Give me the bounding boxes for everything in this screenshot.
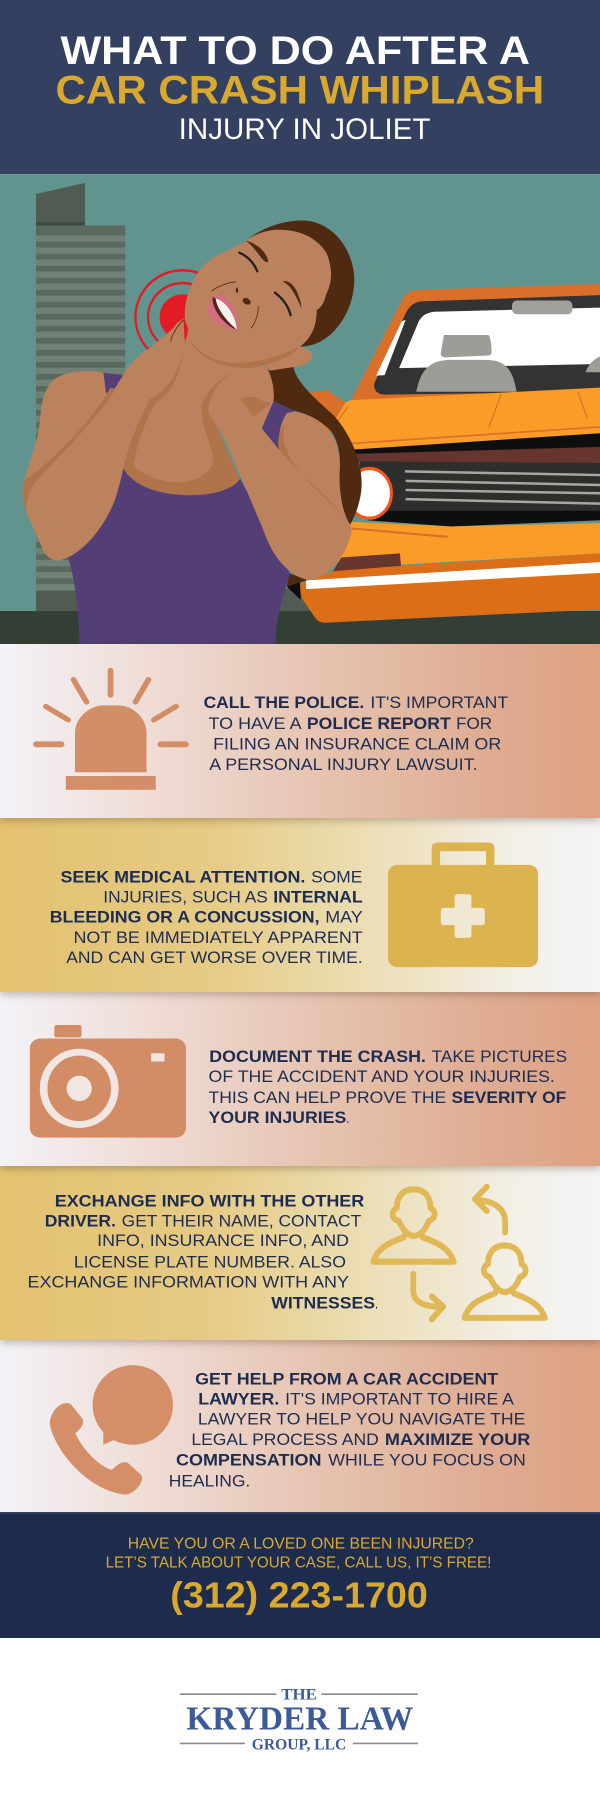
text: call the police: CALL THE POLICE. xyxy=(204,694,364,712)
text: exchange info: GET THEIR NAME, CONTACT xyxy=(122,1213,362,1230)
text: get help from a lawyer: LAWYER. xyxy=(198,1391,279,1409)
text: document the crash: OF THE ACCIDENT AND YOUR INJURIES. xyxy=(209,1068,555,1086)
text: exchange info: WITNESSES xyxy=(271,1295,375,1313)
text: get help from a lawyer: IT'S IMPORTANT TO HIRE A xyxy=(285,1391,514,1409)
eyebrows xyxy=(246,241,302,308)
arrow: down right xyxy=(413,1274,443,1320)
text: exchange info: DRIVER. xyxy=(45,1213,116,1230)
text: exchange info: . xyxy=(375,1295,378,1313)
text: call the police xyxy=(204,694,509,774)
text: get help from a lawyer xyxy=(169,1371,531,1490)
sky background xyxy=(0,174,600,644)
building xyxy=(36,183,125,611)
icon: two people exchanging xyxy=(373,1187,545,1320)
text: document the crash: SEVERITY OF xyxy=(452,1089,566,1107)
text: call the police: FILING AN INSURANCE CLAIM OR xyxy=(213,735,501,753)
closed eyes xyxy=(239,253,291,315)
text: call the police: TO HAVE A xyxy=(209,715,302,733)
text: exchange info: EXCHANGE INFO WITH THE OTHER xyxy=(55,1193,365,1211)
text: document the crash: THIS CAN HELP PROVE THE xyxy=(209,1089,446,1107)
logo: the kryder law group: KRYDER LAW xyxy=(186,1701,413,1738)
text: seek medical attention: INTERNAL xyxy=(273,888,363,906)
text: get help from a lawyer: LAWYER TO HELP YOU NAVIGATE THE xyxy=(198,1411,525,1429)
woman body xyxy=(23,318,362,644)
logo: the kryder law group: THE xyxy=(281,1687,317,1704)
text: document the crash: YOUR INJURIES xyxy=(209,1109,346,1127)
text: call the police: POLICE REPORT xyxy=(307,715,451,733)
panel: get help from a lawyer xyxy=(0,1339,600,1512)
text: seek medical attention: SOME xyxy=(311,868,362,886)
call to action text: LET’S TALK ABOUT YOUR CASE, CALL US, IT’S FREE! xyxy=(106,1554,491,1571)
title xyxy=(55,29,544,146)
ground xyxy=(0,611,600,644)
call to action text: HAVE YOU OR A LOVED ONE BEEN INJURED? xyxy=(128,1535,474,1553)
text: seek medical attention: AND CAN GET WORSE OVER TIME. xyxy=(66,949,363,967)
steps one to three content layer xyxy=(30,668,567,1138)
panel: seek medical attention xyxy=(0,818,600,992)
text: document the crash xyxy=(209,1048,567,1127)
text: call the police: IT'S IMPORTANT xyxy=(370,694,509,712)
illustration: woman with neck pain in front of crashed car xyxy=(0,174,600,644)
text: get help from a lawyer: WHILE YOU FOCUS ON xyxy=(328,1452,526,1470)
right arm and hand xyxy=(208,367,352,580)
text: exchange info: EXCHANGE INFORMATION WITH ANY xyxy=(28,1274,350,1291)
text: get help from a lawyer: LEGAL PROCESS AND xyxy=(191,1432,379,1449)
purple tank top xyxy=(68,467,290,644)
title: INJURY IN JOLIET xyxy=(179,113,430,146)
steps four and five and footer content layer xyxy=(28,1184,548,1754)
text: document the crash: . xyxy=(346,1109,349,1127)
person one xyxy=(373,1189,454,1262)
left arm shadow xyxy=(23,388,116,510)
thumb xyxy=(266,347,312,371)
panel: exchange info xyxy=(0,1166,600,1340)
text: call the police: FOR xyxy=(456,715,492,733)
nose xyxy=(236,288,252,306)
text: get help from a lawyer: GET HELP FROM A CAR ACCIDENT xyxy=(195,1371,499,1389)
header band xyxy=(0,0,600,174)
chin shadow xyxy=(188,338,300,368)
text: seek medical attention: SEEK MEDICAL ATTENTION. xyxy=(60,868,305,886)
left arm xyxy=(23,318,185,561)
panel: call the police xyxy=(0,644,600,818)
illustration and title layer xyxy=(0,0,600,644)
text: seek medical attention xyxy=(50,868,363,967)
panel: call to action footer xyxy=(0,1512,600,1638)
text: exchange info xyxy=(28,1193,378,1313)
palm crease xyxy=(240,397,272,417)
head xyxy=(171,220,354,371)
right arm shadow xyxy=(278,423,349,523)
text: seek medical attention: BLEEDING OR A CONCUSSION, xyxy=(50,908,320,926)
mouth xyxy=(207,294,238,332)
person two xyxy=(465,1245,545,1318)
woman xyxy=(23,220,362,644)
pain target xyxy=(135,270,230,364)
facial lines xyxy=(171,282,258,342)
arrow: up left xyxy=(475,1187,505,1232)
text: document the crash: TAKE PICTURES xyxy=(432,1048,567,1066)
call to action text xyxy=(106,1535,491,1616)
long hair xyxy=(267,367,362,525)
text: seek medical attention: INJURIES, SUCH AS xyxy=(103,888,268,906)
text: get help from a lawyer: MAXIMIZE YOUR xyxy=(385,1432,531,1449)
icon: camera xyxy=(30,1025,186,1138)
text: exchange info: LICENSE PLATE NUMBER. ALSO xyxy=(74,1254,346,1272)
icon: police beacon xyxy=(36,670,186,790)
text: exchange info: INFO, INSURANCE INFO, AND xyxy=(97,1233,349,1250)
call to action text: (312) 223-1700 xyxy=(170,1577,428,1616)
hair xyxy=(247,220,354,347)
car xyxy=(299,284,600,623)
logo: the kryder law group: GROUP, LLC xyxy=(252,1736,346,1754)
icon: phone and speech bubble xyxy=(50,1365,173,1495)
chest xyxy=(133,320,267,483)
text: get help from a lawyer: COMPENSATION xyxy=(176,1452,321,1470)
text: seek medical attention: MAY xyxy=(325,908,363,926)
icon: first aid kit xyxy=(388,842,538,967)
text: get help from a lawyer: HEALING. xyxy=(169,1473,250,1490)
neck shadow xyxy=(123,345,185,468)
title: WHAT TO DO AFTER A xyxy=(60,29,530,74)
text: call the police: A PERSONAL INJURY LAWSUIT. xyxy=(209,756,478,774)
logo: the kryder law group xyxy=(180,1687,418,1754)
chest shadow xyxy=(123,370,240,495)
title: CAR CRASH WHIPLASH xyxy=(55,68,544,113)
text: seek medical attention: NOT BE IMMEDIATELY APPARENT xyxy=(73,929,363,947)
hair below bumper xyxy=(287,573,308,600)
text: document the crash: DOCUMENT THE CRASH. xyxy=(209,1048,426,1066)
panel: document the crash xyxy=(0,992,600,1166)
face xyxy=(185,230,331,363)
